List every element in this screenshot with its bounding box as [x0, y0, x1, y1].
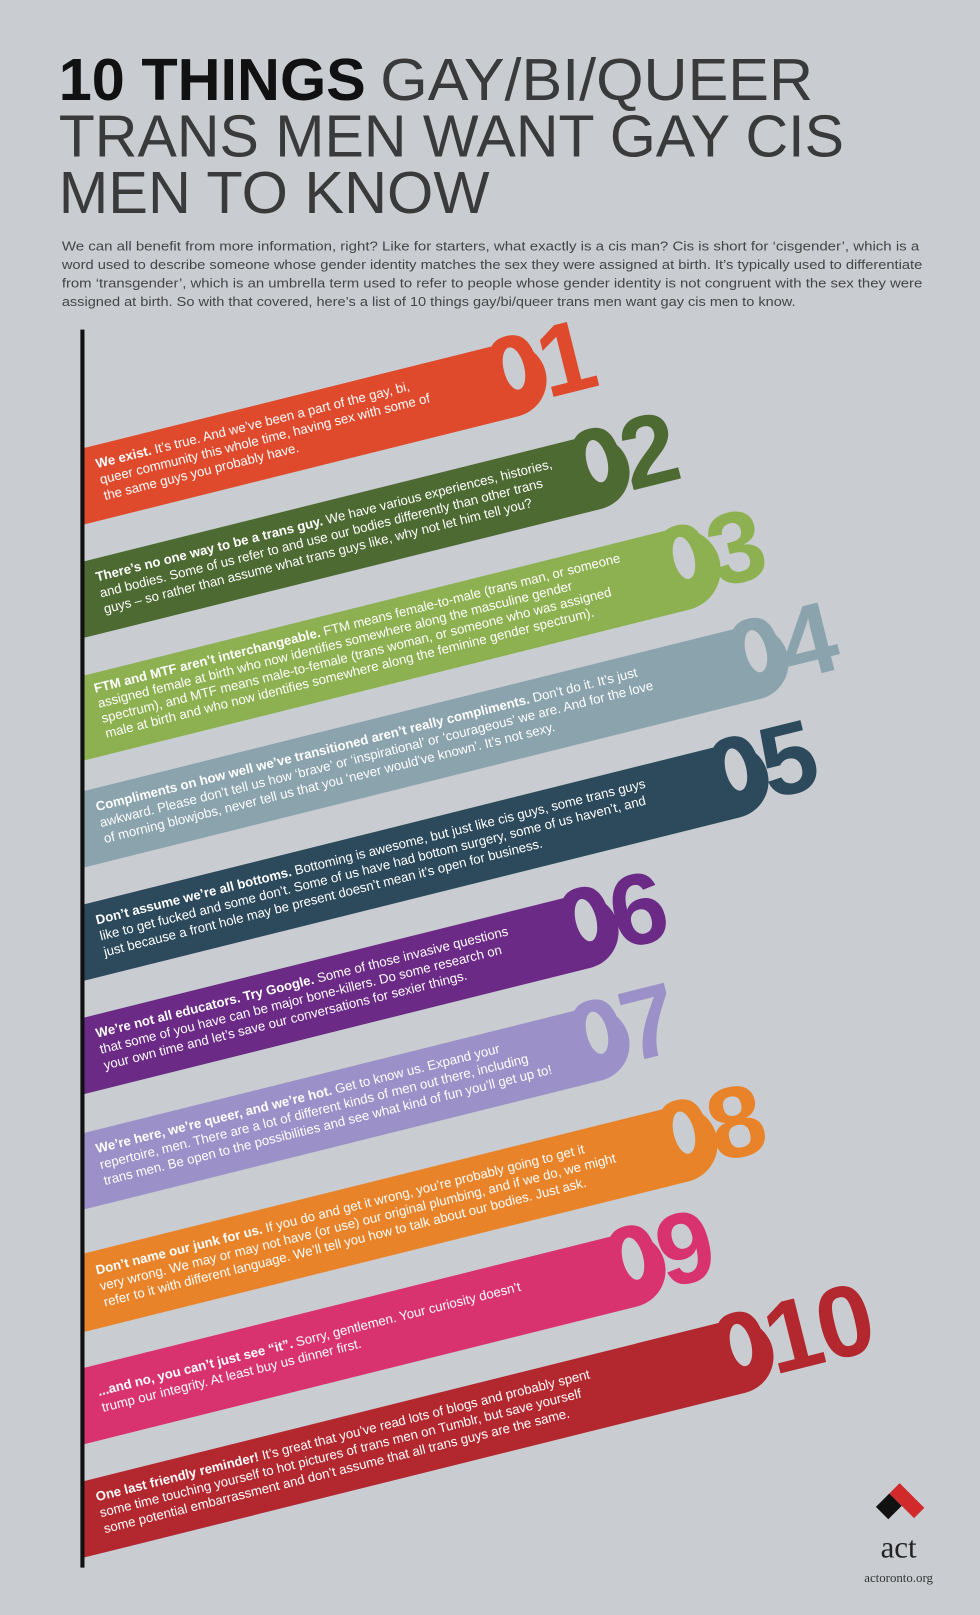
band 01: queer community this whole time, having sex with some of [98, 390, 432, 487]
band 01: 01 [474, 298, 605, 433]
band 03: FTM means female-to-male (trans man, or someone [322, 550, 622, 639]
band 10: some potential embarrassment and don’t assume that all trans guys are the same. [102, 1406, 571, 1536]
band 10: One last friendly reminder! [94, 1449, 260, 1504]
band 01: It’s true. And we’ve been a part of the gay, bi, [153, 378, 411, 456]
band 04: Don’t do it. It’s just [531, 665, 639, 705]
band 08: refer to it with different language. We’ll tell you how to talk about our bodies. Just ask. [102, 1175, 588, 1310]
band 03: FTM and MTF aren’t interchangeable. [92, 625, 322, 696]
band 05 [84, 720, 816, 981]
title: TRANS MEN WANT GAY CIS [59, 103, 844, 170]
title [59, 46, 844, 226]
band 10: It’s great that you’ve read lots of blogs and probably spent [260, 1367, 591, 1463]
title: 10 THINGSGAY/BI/QUEER [59, 46, 813, 113]
band 07: 07 [557, 962, 687, 1097]
band 09: trump our integrity. At least buy us dinner first. [100, 1336, 363, 1415]
band 05: just because a front hole may be present doesn’t mean it’s open for business. [101, 836, 544, 960]
intro text: from ‘transgender’, which is an umbrella term used to refer to people whose gender identity is not congruent with the sex they were [62, 275, 922, 290]
band 07: trans men. Be open to the possibilities and see what kind of fun you’ll get up to! [102, 1062, 553, 1188]
band 05: 05 [696, 699, 827, 834]
band 10 [84, 1286, 870, 1558]
band 05: like to get fucked and some don’t. Some of us have had bottom surgery, some of us haven’t, and [98, 793, 647, 943]
band 01: the same guys you probably have. [102, 440, 300, 503]
band 08: 08 [644, 1062, 775, 1197]
band 06: We’re not all educators. Try Google. [94, 972, 316, 1041]
band 09: ...and no, you can’t just see “it”. [96, 1336, 294, 1399]
band 10: 010 [701, 1262, 883, 1409]
logo: act: actoronto.org [864, 1571, 934, 1585]
band 02 [84, 414, 681, 638]
band 04: of morning blowjobs, never tell us that you ‘never would’ve known’. It’s not sexy. [102, 719, 556, 846]
band 07: Get to know us. Expand your [333, 1041, 501, 1096]
band 07 [84, 982, 666, 1210]
band 01 [84, 322, 600, 524]
band 05: Bottoming is awesome, but just like cis guys, some trans guys [293, 776, 647, 878]
band 10: some time touching yourself to hot pictures of trans men on Tumblr, but save yourself [98, 1386, 583, 1520]
band 03: 03 [644, 488, 774, 622]
band 02: guys – so rather than assume what trans guys like, why not let him tell you? [102, 495, 533, 616]
intro text [61, 238, 922, 309]
icon: act chevron [876, 1483, 924, 1519]
logo: act: act [881, 1529, 917, 1564]
vertical timeline line [80, 330, 85, 1568]
band 03: spectrum), and MTF means male-to-female (trans woman, or someone who was assigned [100, 584, 613, 726]
band 04: 04 [716, 580, 849, 715]
intro text: We can all benefit from more information, right? Like for starters, what exactly is a cis man? Cis is short for ‘cisgender’, which is a [62, 238, 920, 253]
band 06: that some of you have can be major bone-killers. Do some research on [98, 942, 503, 1057]
band 03: male at birth and who now identifies somewhere along the feminine gender spectrum). [104, 605, 595, 741]
band 02: 02 [557, 391, 687, 525]
intro text: assigned at birth. So with that covered, here’s a list of 10 things gay/bi/queer trans men want gay cis men to know. [62, 294, 796, 309]
band 09: Sorry, gentlemen. Your curiosity doesn’t [294, 1279, 522, 1349]
band 03: assigned female at birth who now identifies somewhere along the masculine gender [96, 578, 574, 711]
band 06: your own time and let’s save our conversations for sexier things. [102, 968, 469, 1073]
intro text: word used to describe someone whose gender identity matches the sex they were assigned at birth. It’s typically used to differentiate [61, 257, 922, 272]
band 04: awkward. Please don’t tell us how ‘brave’ or ‘inspirational’ or ‘courageous’ we are. And for the love [98, 678, 655, 830]
band 07: repertoire, men. There are a lot of different kinds of men out there, including [98, 1051, 530, 1172]
band 04 [84, 602, 840, 868]
band 09 [84, 1212, 711, 1444]
band 06: Some of those invasive questions [316, 923, 510, 985]
band 03 [84, 512, 764, 760]
band 05: Don’t assume we’re all bottoms. [94, 864, 293, 927]
band 08: If you do and get it wrong, you’re probably going to get it [264, 1141, 586, 1235]
band 06 [84, 874, 666, 1094]
band 08 [84, 1086, 765, 1332]
band 08: very wrong. We may or may not have (or use) our original plumbing, and if we do, we might [98, 1150, 618, 1294]
band 02: We have various experiences, histories, [324, 456, 554, 527]
title: MEN TO KNOW [59, 159, 490, 226]
band 04: Compliments on how well we’ve transitioned aren’t really compliments. [94, 692, 531, 814]
band 01: We exist. [94, 443, 153, 471]
logo: act [864, 1483, 934, 1585]
band 08: Don’t name our junk for us. [94, 1222, 264, 1278]
band 06: 06 [546, 850, 676, 984]
band 02: and bodies. Some of us refer to and use our bodies differently than other trans [98, 475, 545, 600]
band 09: 09 [593, 1188, 723, 1323]
band 07: We’re here, we’re queer, and we’re hot. [94, 1083, 333, 1156]
band 02: There’s no one way to be a trans guy. [94, 513, 324, 584]
